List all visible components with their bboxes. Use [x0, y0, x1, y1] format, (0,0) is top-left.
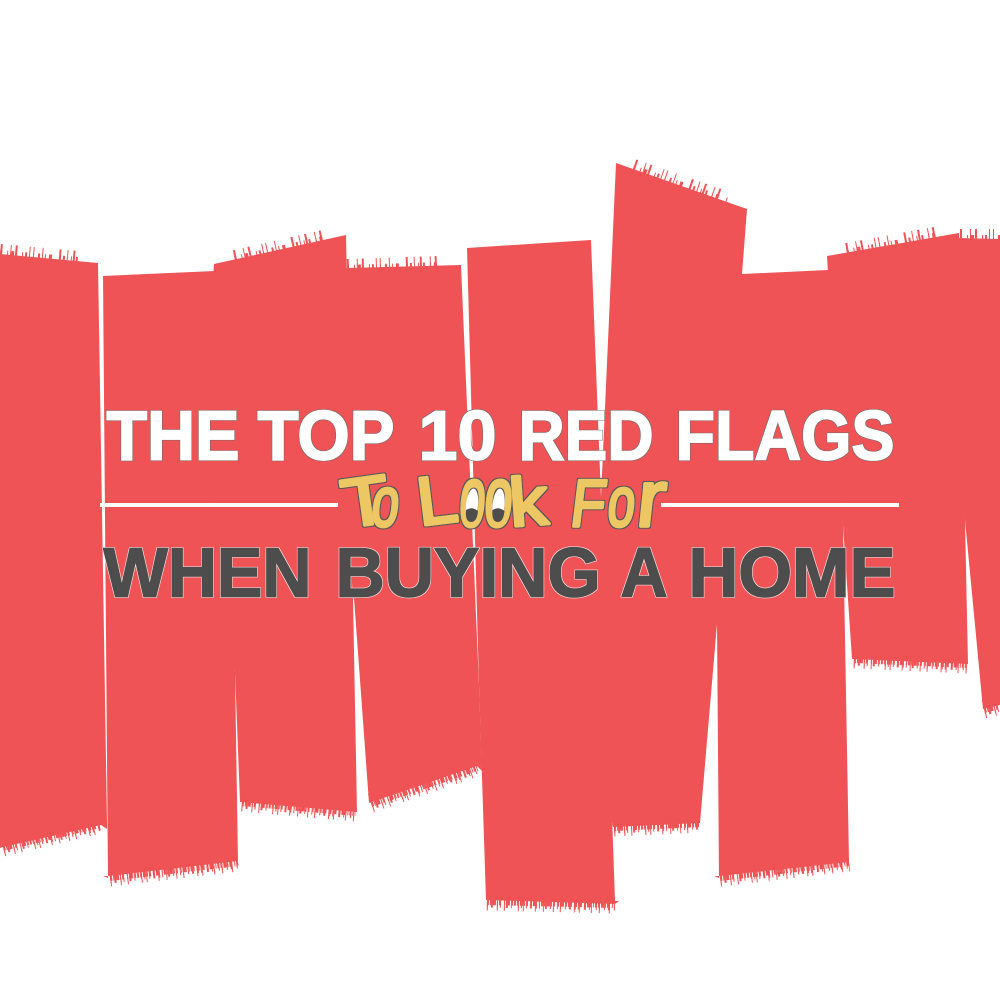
subheading: to look for: o	[604, 462, 640, 541]
heading: when buying a home: BUYING	[336, 533, 600, 611]
paint stroke 2	[103, 271, 238, 878]
paint stroke 5	[467, 240, 619, 904]
divider right	[661, 503, 899, 507]
paint stroke 7	[700, 270, 849, 878]
red paint strokes background	[0, 163, 1000, 904]
icon: eyes in the letters o	[464, 488, 506, 522]
paint stroke 9	[950, 238, 1000, 709]
subheading: to look for	[337, 450, 671, 545]
divider left	[100, 503, 338, 507]
paint stroke 1	[0, 254, 107, 848]
heading: the top 10 red flags: TOP	[258, 396, 394, 474]
heading: when buying a home: A	[620, 533, 668, 611]
heading: the top 10 red flags: RED	[518, 396, 654, 474]
subheading: to look for: F	[567, 467, 610, 541]
paint stroke 8	[815, 233, 968, 664]
subheading: to look for: k	[507, 463, 551, 541]
subheading: to look for: o	[368, 462, 404, 541]
paint stroke 4	[335, 265, 482, 803]
subheading: to look for: r	[633, 453, 671, 543]
heading: the top 10 red flags	[106, 396, 894, 474]
paint stroke 6	[590, 163, 747, 827]
heading: when buying a home: HOME	[688, 533, 896, 611]
heading: the top 10 red flags: FLAGS	[676, 396, 894, 474]
subheading: to look for: o	[457, 450, 489, 545]
paint stroke 3	[205, 235, 357, 812]
heading: when buying a home	[104, 533, 896, 611]
subheading: to look for: o	[482, 450, 516, 545]
heading: when buying a home: WHEN	[104, 533, 312, 611]
subheading: to look for: L	[413, 460, 462, 540]
heading: the top 10 red flags: 10	[418, 396, 496, 474]
heading: the top 10 red flags: THE	[106, 396, 240, 474]
subheading: to look for: T	[337, 461, 394, 543]
